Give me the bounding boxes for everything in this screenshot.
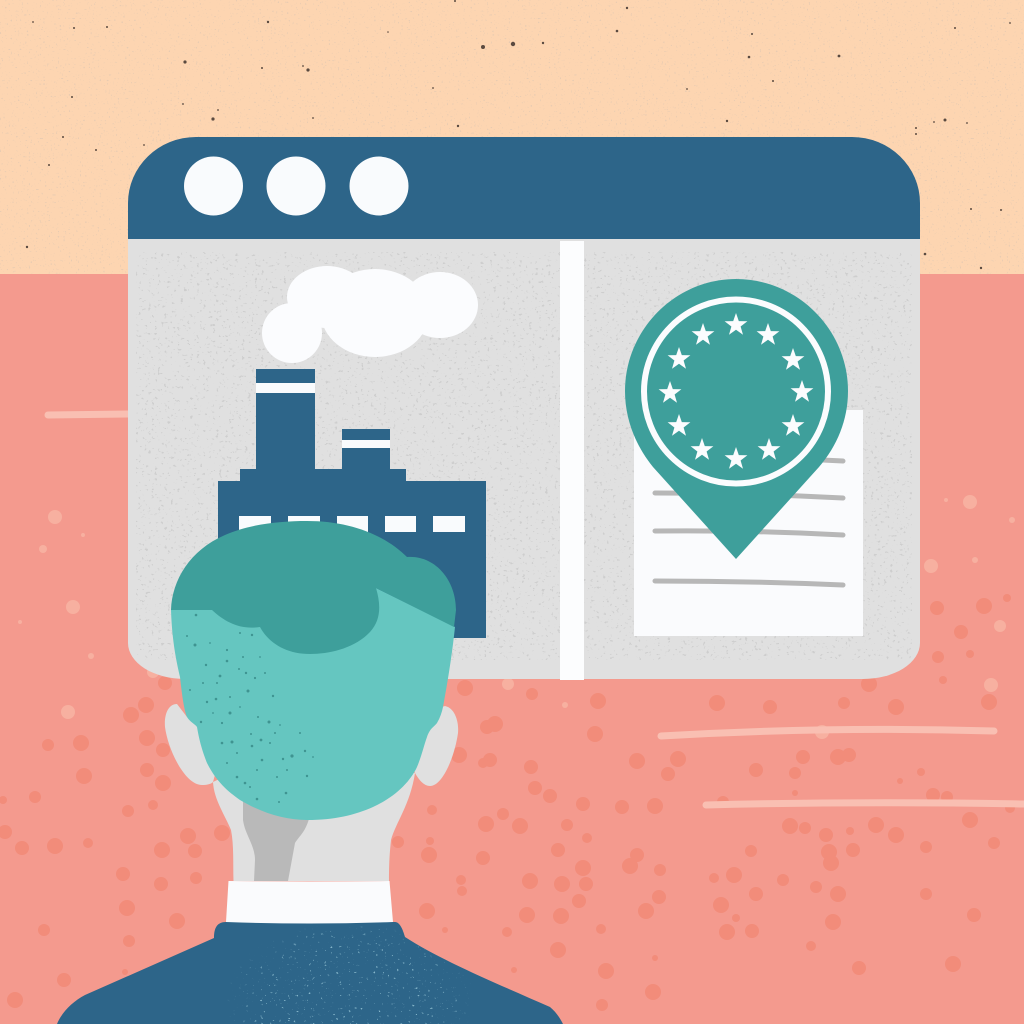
document lines [655, 458, 843, 585]
factory windows [239, 516, 465, 532]
head [171, 588, 455, 820]
background: coral ground [0, 274, 1024, 1024]
factory [218, 369, 486, 638]
coral dots [0, 594, 1015, 1011]
person seen from behind [57, 521, 563, 1024]
factory silhouette [218, 369, 486, 638]
window body [128, 239, 920, 679]
left ear [165, 704, 230, 785]
window buttons [184, 156, 408, 216]
jacket texture [228, 926, 469, 1024]
background: sand sky [0, 0, 1024, 276]
pin shape [625, 279, 848, 559]
neck [213, 740, 415, 881]
jacket [57, 922, 563, 1024]
light dots [18, 495, 1015, 739]
head specks [186, 614, 314, 803]
window divider [560, 241, 584, 680]
collar [226, 881, 393, 924]
dark specks [26, 0, 1011, 269]
neck shadow [243, 790, 310, 881]
browser window [128, 137, 920, 680]
hair [171, 521, 456, 654]
cloud of smoke [262, 266, 478, 363]
right ear [400, 706, 458, 786]
window title bar [128, 137, 920, 239]
EU stars [659, 313, 813, 469]
document [634, 410, 863, 636]
pin ring [644, 300, 828, 484]
window texture [128, 239, 920, 680]
location pin with EU stars [625, 279, 848, 559]
chimney stripes [256, 383, 315, 393]
chalk strokes [48, 414, 1024, 805]
